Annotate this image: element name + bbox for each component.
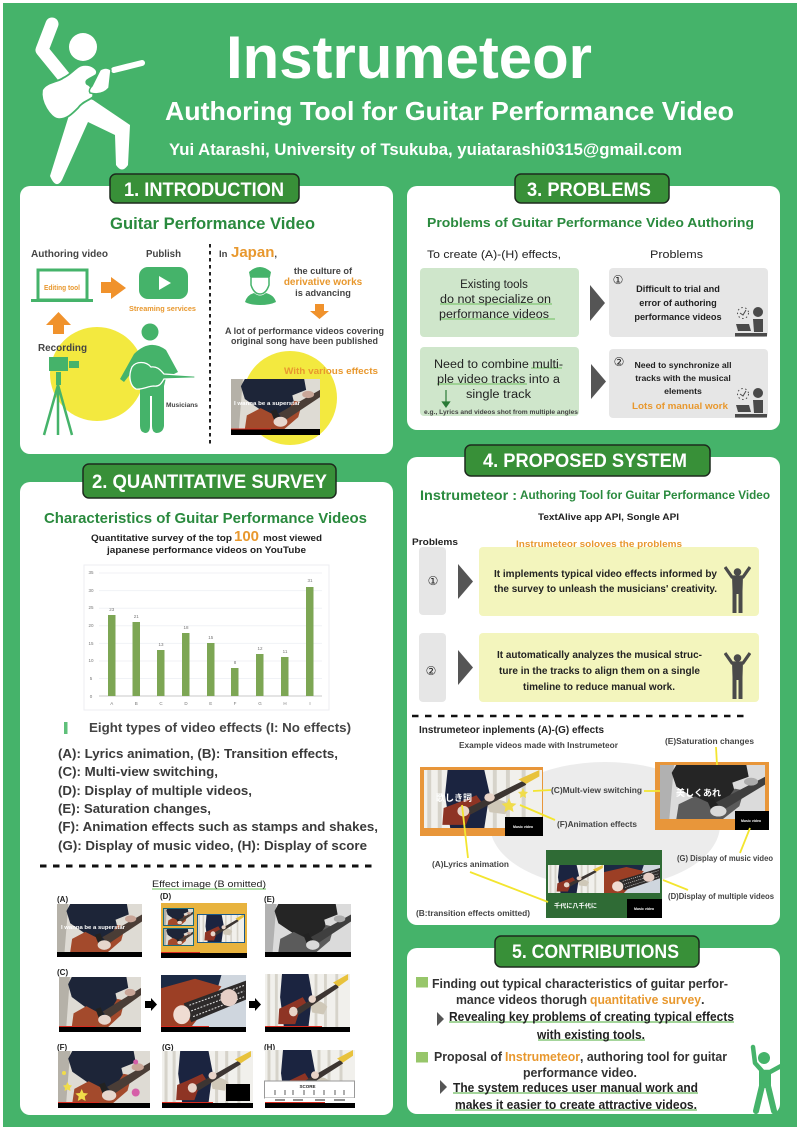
text: survey description: japanese performance videos on YouTube <box>106 545 306 556</box>
box: solution 1: It implements typical video effects informed by <box>494 569 718 580</box>
effect image E: (E) <box>264 895 275 904</box>
callout labels: (C)Mult-view switching <box>551 785 642 795</box>
bar chart: 15 <box>208 635 214 640</box>
bar chart: 25 <box>88 605 94 610</box>
text: system reduces work: The system reduces user manual work and <box>453 1080 698 1095</box>
box: existing tools <box>420 268 579 337</box>
effect image A: (A) <box>57 895 68 904</box>
effect image C sequence <box>57 968 350 1032</box>
arrow <box>590 285 605 321</box>
icon: guitarist <box>42 24 142 184</box>
effect image F: (F) <box>57 1043 68 1052</box>
icon: cheering person <box>725 653 750 699</box>
bar chart: 18 <box>183 625 189 630</box>
bar chart <box>84 565 329 710</box>
bar chart: 5 <box>90 676 93 681</box>
box: solution 2: ture in the tracks to align them on a single <box>499 666 701 677</box>
example video: right: Music video <box>741 819 761 823</box>
box: problem 2: Need to synchronize all <box>634 360 732 370</box>
bar chart: 23 <box>109 607 115 612</box>
bar chart: 35 <box>88 570 94 575</box>
text: contribution 1: quantitative survey <box>590 992 702 1007</box>
photo: performance video <box>231 379 320 435</box>
text: contribution 1: mance videos thorugh <box>456 992 587 1007</box>
text: in japan: Japan <box>231 244 274 261</box>
effect image A <box>57 895 142 957</box>
label: musicians: Musicians <box>166 402 198 409</box>
icon: person at desk <box>735 307 767 336</box>
box: problem 2: Lots of manual work <box>632 401 729 412</box>
bullet <box>416 977 428 988</box>
bar chart: 13 <box>158 642 164 647</box>
text: system reduces work <box>453 1080 698 1112</box>
heading: introduction <box>110 174 299 203</box>
text: in japan: In <box>219 249 227 260</box>
callout labels: (G) Display of music video <box>677 853 773 863</box>
arrow: down <box>310 304 329 319</box>
example video: bottom <box>546 850 662 918</box>
bar chart: E <box>209 701 212 706</box>
heading: contributions <box>495 936 699 967</box>
box: problem 2 tag: ② <box>426 664 436 678</box>
bullet <box>416 1052 428 1062</box>
divider <box>40 864 378 868</box>
effect image G: (G) <box>162 1043 174 1052</box>
bar chart: 31 <box>307 578 313 583</box>
bar chart: 30 <box>88 588 94 593</box>
box: multiple tracks: ple video tracks into a <box>437 374 561 386</box>
box: multiple tracks: e.g., Lyrics and videos shot from multiple angles <box>424 410 579 416</box>
text: example videos: Example videos made with Instrumeteor <box>459 740 619 750</box>
panel: problems <box>407 174 780 430</box>
heading: proposed system <box>465 445 710 476</box>
label: publish: Publish <box>146 249 181 260</box>
text: survey description <box>91 528 322 556</box>
icon: streaming play button <box>139 267 188 299</box>
effect image F <box>57 1043 150 1108</box>
box: solution 2: It automatically analyzes the musical struc- <box>497 650 702 661</box>
decoration: yellow circle <box>243 351 337 445</box>
decoration: yellow circle <box>50 327 144 421</box>
label: solves the problems: Instrumeteor soloves the problems <box>516 539 682 550</box>
text: system reduces work: makes it easier to create attractive videos. <box>455 1097 697 1112</box>
label: problems: Problems <box>412 537 458 547</box>
subheading: instrumeteor: Instrumeteor : <box>420 487 517 503</box>
legend mark <box>64 722 68 734</box>
effect image A: I wanna be a superstar <box>61 925 126 931</box>
box: problem 1: ① <box>613 273 623 287</box>
bar chart: G <box>258 701 262 706</box>
heading: effect image: Effect image (B omitted) <box>152 879 266 890</box>
heading: introduction: 1. INTRODUCTION <box>124 180 284 201</box>
arrow: to publish <box>101 277 126 299</box>
subheading: instrumeteor: Authoring Tool for Guitar Performance Video <box>520 488 770 502</box>
heading: contributions: 5. CONTRIBUTIONS <box>512 942 679 963</box>
bar chart: 0 <box>90 694 93 699</box>
subheading: instrumeteor <box>420 487 770 503</box>
text: contribution 2: Proposal of <box>434 1049 503 1064</box>
box: problem 1 tag: ① <box>428 574 438 588</box>
effect image G <box>162 1043 253 1108</box>
example video: bottom: Music video <box>634 907 654 911</box>
heading: problems: 3. PROBLEMS <box>527 180 651 201</box>
text: culture of derivative works: derivative works <box>284 277 363 288</box>
box: problem 2 <box>609 349 768 418</box>
heading: proposed system: 4. PROPOSED SYSTEM <box>483 451 687 472</box>
label: authoring video: Authoring video <box>31 249 108 260</box>
bar chart: H <box>283 701 287 706</box>
text: revealing problems <box>449 1009 734 1042</box>
list: effect types: (G): Display of music video, (H): Display of score <box>58 838 367 853</box>
text: survey description: most viewed <box>263 533 322 544</box>
subheading: Guitar Performance Video <box>110 214 315 233</box>
arrow: recording up <box>46 312 71 334</box>
box: problem 2 tag <box>419 633 446 702</box>
callout lines <box>462 747 750 902</box>
label: streaming services: Streaming services <box>129 304 196 313</box>
bar chart: F <box>234 701 237 706</box>
text: revealing problems: with existing tools. <box>536 1027 645 1042</box>
box: problem 1 tag <box>419 547 446 615</box>
subheading: Problems of Guitar Performance Video Authoring <box>427 215 754 230</box>
box: problem 1: Difficult to trial and <box>636 284 720 294</box>
arrow <box>249 998 261 1011</box>
text: revealing problems: Revealing key problems of creating typical effects <box>449 1009 734 1024</box>
bar chart: A <box>110 701 113 706</box>
text: survey description: Quantitative survey of the top <box>91 533 232 544</box>
callout labels: (D)Display of multiple videos <box>668 891 774 901</box>
label: problems column: Problems <box>650 249 704 261</box>
bar chart: B <box>135 701 138 706</box>
box: problem 2: elements <box>664 386 702 396</box>
text: contribution 1: Finding out typical characteristics of guitar perfor- <box>432 976 728 991</box>
bar chart: 11 <box>283 649 288 654</box>
list: effect types: (D): Display of multiple videos, <box>58 783 252 798</box>
list: effect types: (C): Multi-view switching, <box>58 764 218 779</box>
effect image E <box>264 895 351 957</box>
example video: bottom: 千代に八千代に <box>554 901 597 910</box>
example video: left: Music video <box>513 825 533 829</box>
text: performance videos published: original song have been published <box>231 336 378 346</box>
icon: cheering person <box>725 567 750 613</box>
text: contribution 2: , authoring tool for guitar <box>580 1049 727 1064</box>
arrow <box>145 998 157 1011</box>
text: APIs: TextAlive app API, Songle API <box>538 512 679 523</box>
box: problem 1: performance videos <box>634 312 722 322</box>
label: with various effects: With various effects <box>284 366 378 377</box>
box: problem 1 <box>609 268 768 337</box>
legend heading: Eight types of video effects (I: No effects) <box>89 720 351 735</box>
example video: left: 歌しき詞 <box>436 791 472 804</box>
arrow <box>437 1012 444 1026</box>
box: problem 2: tracks with the musical <box>635 373 731 383</box>
text: in japan: , <box>274 249 277 260</box>
arrow <box>458 564 473 599</box>
callout labels: (B:transition effects omitted) <box>416 908 530 918</box>
heading: problems <box>515 174 669 203</box>
box: existing tools: Existing tools <box>460 279 528 291</box>
text: contribution 2: performance video. <box>523 1065 637 1080</box>
example video: right <box>655 762 769 830</box>
arrow <box>458 650 473 685</box>
callout labels: (A)Lyrics animation <box>432 859 509 869</box>
box: problem 1: error of authoring <box>639 298 717 308</box>
callout labels: (F)Animation effects <box>557 819 637 829</box>
icon: camera on tripod <box>44 357 79 435</box>
divider <box>412 715 747 717</box>
bar chart: 8 <box>234 660 237 665</box>
callout labels <box>416 736 774 918</box>
bar chart: D <box>184 701 188 706</box>
text: contribution 2 <box>434 1049 727 1080</box>
authors: Yui Atarashi, University of Tsukuba, yuiatarashi0315@gmail.com <box>169 140 682 159</box>
effect image D: (D) <box>160 892 171 901</box>
bar chart: C <box>159 701 163 706</box>
divider <box>209 244 211 445</box>
panel: quantitative survey <box>20 464 393 1115</box>
arrow: example <box>442 390 450 407</box>
panel: introduction <box>20 174 393 454</box>
text: contribution 2: Instrumeteor <box>505 1049 580 1064</box>
box: multiple tracks <box>420 347 579 416</box>
panel: contributions <box>407 936 781 1114</box>
bar chart: I <box>309 701 311 706</box>
example video: right: 美しくあれ <box>676 786 721 799</box>
bar chart: 12 <box>257 646 263 651</box>
callout labels: (E)Saturation changes <box>665 736 754 746</box>
arrow <box>440 1080 447 1094</box>
bar chart: 10 <box>88 658 94 663</box>
icon: laptop editing tool <box>31 270 93 302</box>
box: multiple tracks: single track <box>466 389 531 401</box>
effect image H: SCORE <box>300 1084 316 1089</box>
box: existing tools: do not specialize on <box>440 294 551 306</box>
panel: proposed system <box>407 445 780 925</box>
text: performance videos published <box>225 326 384 346</box>
list: effect types: (E): Saturation changes, <box>58 801 211 816</box>
icon: musician with guitar <box>120 324 195 433</box>
text: culture of derivative works: is advancing <box>295 288 351 298</box>
list: effect types: (A): Lyrics animation, (B): Transition effects, <box>58 746 338 761</box>
icon: cheering person green <box>753 1047 781 1111</box>
box: solution 2: timeline to reduce manual work. <box>523 682 675 693</box>
text: culture of derivative works <box>284 266 363 298</box>
label: recording: Recording <box>38 343 87 354</box>
box: problem 2: ② <box>614 355 624 369</box>
text: culture of derivative works: the culture of <box>294 266 353 276</box>
box: solution 1 <box>479 547 759 616</box>
box: multiple tracks: Need to combine multi- <box>434 359 563 371</box>
effect image H <box>264 1043 355 1108</box>
box: solution 2 <box>479 633 759 702</box>
subtitle: Authoring Tool for Guitar Performance Video <box>165 96 734 126</box>
arrow <box>591 364 606 399</box>
list: effect types: (F): Animation effects such as stamps and shakes, <box>58 819 378 834</box>
text: implements effects: Instrumeteor inplements (A)-(G) effects <box>419 725 604 736</box>
bar chart: 20 <box>88 623 94 628</box>
list: effect types <box>58 746 378 853</box>
example video: left <box>420 767 543 836</box>
photo: performance video: I wanna be a superstar <box>234 401 301 407</box>
bar chart: 15 <box>88 641 94 646</box>
icon: laptop editing tool: Editing tool <box>44 285 80 292</box>
effect image D <box>160 892 247 958</box>
heading: quantitative survey: 2. QUANTITATIVE SURVEY <box>92 472 327 493</box>
icon: person <box>245 267 276 305</box>
effect image H: (H) <box>264 1043 275 1052</box>
text: survey description: 100 <box>234 528 259 545</box>
heading: quantitative survey <box>83 464 336 498</box>
bar chart: 21 <box>134 614 139 619</box>
text: contribution 1: . <box>701 992 705 1007</box>
icon: person at desk <box>735 388 767 418</box>
text: contribution 1 <box>432 976 728 1007</box>
subheading: Characteristics of Guitar Performance Videos <box>44 510 367 527</box>
box: existing tools: performance videos <box>439 309 549 321</box>
title: Instrumeteor <box>226 24 592 91</box>
box: solution 1: the survey to unleash the musicians' creativity. <box>494 584 717 595</box>
label: to create effects: To create (A)-(H) effects, <box>427 249 561 261</box>
effect image C sequence: (C) <box>57 968 68 977</box>
text: performance videos published: A lot of performance videos covering <box>225 326 384 336</box>
decoration: gray ellipse <box>490 762 720 888</box>
